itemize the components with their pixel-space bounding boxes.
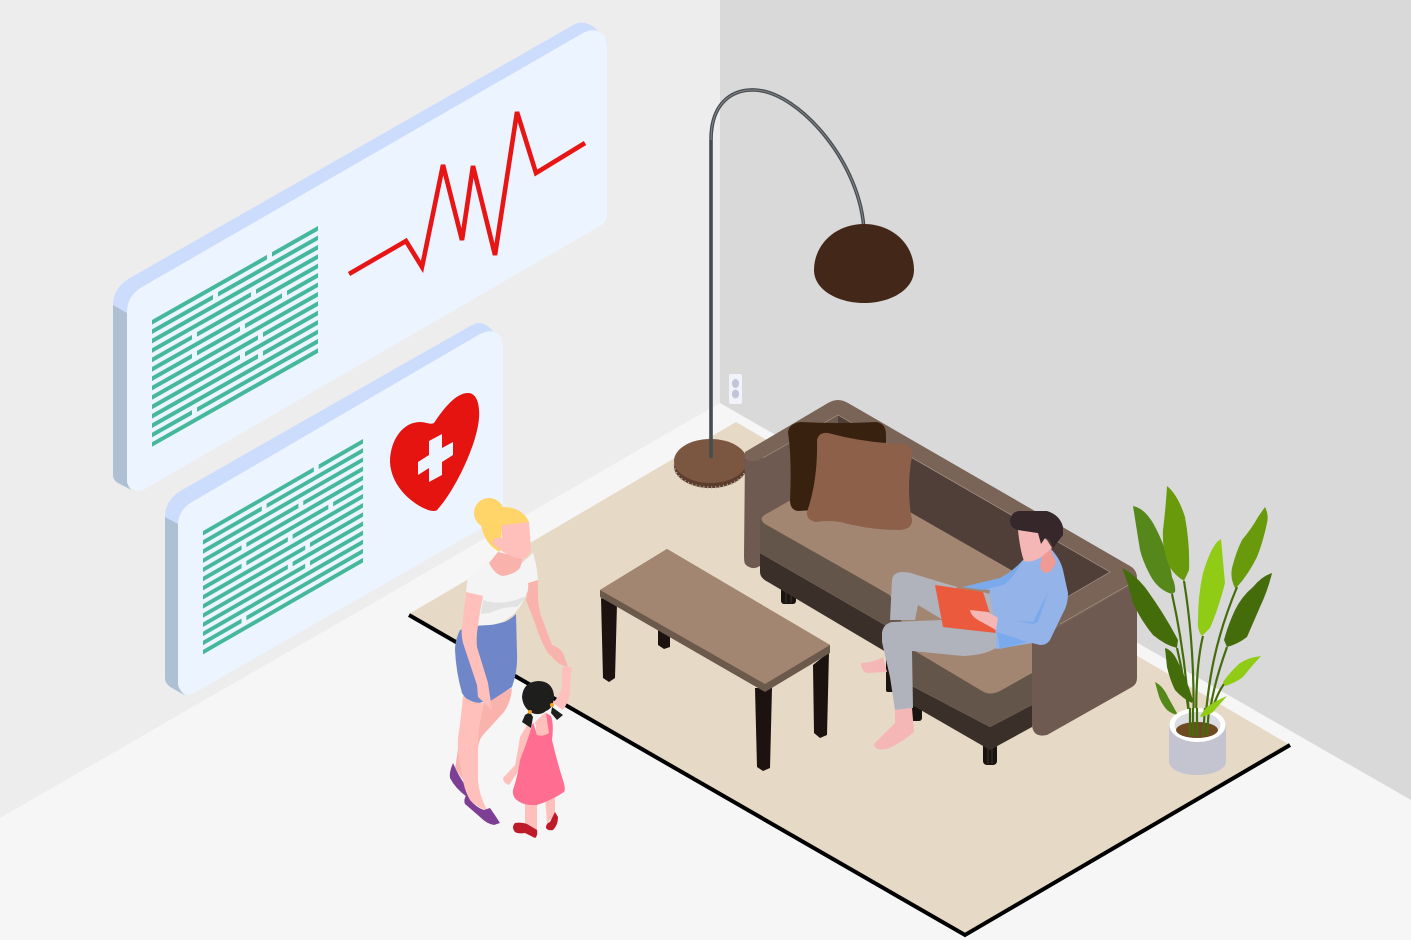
hair ties [528, 703, 554, 714]
hand [970, 610, 998, 630]
sofa [744, 400, 1137, 765]
book [935, 585, 996, 633]
left arm [462, 592, 492, 710]
stems [1172, 581, 1237, 735]
ECG line [349, 112, 585, 274]
left arm [503, 725, 531, 785]
front leg [458, 696, 487, 810]
coffee table [600, 549, 830, 771]
wall outlet [729, 374, 742, 404]
table legs [601, 598, 829, 771]
rug [409, 422, 1290, 935]
front leaves [1200, 656, 1261, 717]
sofa seam lines [763, 415, 1110, 597]
right wall [720, 0, 1411, 940]
text lines block [152, 226, 318, 447]
brown cushion [807, 433, 912, 530]
seat front [760, 520, 1032, 727]
chest and neck [489, 552, 523, 576]
right arm [1032, 580, 1137, 736]
hair [1010, 511, 1063, 548]
lamp base [674, 439, 747, 488]
sweater [963, 548, 1068, 649]
leaves [1122, 486, 1272, 715]
dark cushion [788, 422, 886, 511]
dress [513, 713, 565, 805]
left arm [744, 415, 838, 568]
back leg [455, 688, 512, 790]
front shoe [464, 794, 500, 825]
back skin [535, 712, 550, 737]
seat base [760, 553, 1032, 750]
back shoe [450, 763, 467, 797]
lamp pole [711, 90, 864, 458]
skirt [455, 614, 517, 704]
floor lamp [674, 90, 914, 488]
sweater shading [963, 562, 1048, 649]
left wall [0, 0, 720, 940]
back foot [861, 657, 887, 673]
panel: medical heart card [165, 323, 503, 697]
front foot [874, 708, 914, 750]
girl head [522, 681, 554, 714]
neck and face [1018, 530, 1056, 573]
lamp shade [814, 224, 914, 303]
man reading [861, 511, 1068, 750]
table top [600, 549, 830, 692]
floor [0, 403, 1411, 940]
icon: heart with cross [390, 393, 479, 511]
shirt shadow [481, 595, 528, 614]
pants [882, 572, 996, 710]
hair bun [474, 498, 529, 552]
sofa legs [781, 582, 997, 765]
girl shoes [513, 812, 558, 838]
plant pot [1169, 708, 1226, 775]
text lines block [203, 439, 363, 654]
girl [503, 667, 572, 838]
pigtails [522, 707, 563, 728]
right arm [553, 667, 572, 710]
woman [450, 498, 568, 825]
sofa back [745, 400, 1137, 660]
back interior [760, 415, 1110, 620]
right arm [526, 580, 568, 667]
shirt [466, 553, 538, 625]
panel: heart rate monitor [113, 23, 607, 492]
potted plant [1122, 486, 1272, 775]
stems in soil [1190, 708, 1209, 737]
seat top [762, 472, 1032, 694]
face [492, 522, 531, 559]
girl legs [525, 796, 555, 830]
